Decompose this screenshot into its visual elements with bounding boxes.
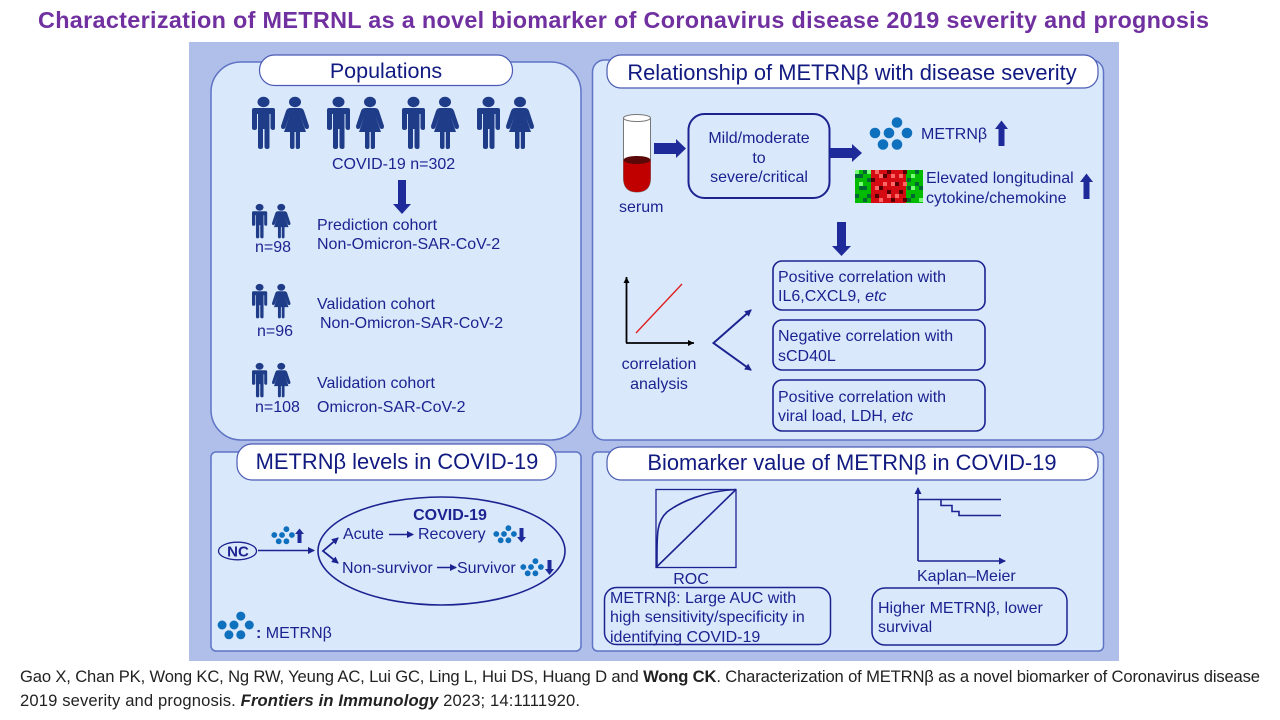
result box: sCD40L — [773, 320, 985, 370]
icon: NC dots up — [271, 526, 304, 544]
cytokine label — [926, 170, 1074, 207]
cytokine label: Elevated longitudinal — [926, 170, 1074, 187]
acute to recovery: Recovery — [418, 526, 486, 543]
heading: relationship: Relationship of METRNβ with disease severity — [627, 60, 1077, 85]
ROC text box: identifying COVID-19 — [610, 629, 760, 646]
correlation label: correlation — [622, 356, 696, 373]
correlation label — [622, 356, 696, 393]
severity box: Mild/moderate — [708, 130, 810, 147]
cohort: prediction: Non-Omicron-SAR-CoV-2 — [317, 236, 500, 253]
severity box — [688, 114, 830, 198]
arrow: down to cohorts — [393, 180, 411, 214]
heading: levels — [237, 444, 556, 480]
panel: relationship with disease severity — [592, 55, 1104, 440]
non-survivor to survivor: Survivor — [457, 560, 516, 577]
cohort: validation omicron — [252, 363, 466, 416]
ROC text box: METRNβ: Large AUC with — [610, 590, 796, 607]
arrow: serum to severity — [654, 139, 686, 158]
result box: viral load: Positive correlation with — [778, 389, 946, 406]
arrow: branches — [323, 538, 338, 563]
result box: viral load: viral load, LDH, etc — [778, 408, 913, 425]
heading: biomarker — [607, 447, 1098, 480]
arrow: correlation branches — [714, 310, 751, 370]
cohort: prediction — [252, 204, 500, 256]
background panel — [189, 42, 1119, 661]
cohort: validation non-omicron: n=96 — [257, 323, 293, 340]
icon: METRNβ dots — [870, 117, 912, 150]
panel: METRNβ levels — [211, 444, 581, 651]
acute to recovery: Acute — [343, 526, 384, 543]
cohort: validation non-omicron: Non-Omicron-SAR-CoV-2 — [320, 315, 503, 332]
severity box: to — [752, 150, 766, 167]
result box: sCD40L: Negative correlation with — [778, 328, 953, 345]
ROC label: ROC — [673, 571, 709, 588]
arrow: METRNβ up — [995, 120, 1008, 146]
icon: serum tube — [624, 114, 650, 192]
cohort: prediction: n=98 — [255, 239, 291, 256]
Kaplan-Meier text box: Higher METRNβ, lower — [878, 600, 1043, 617]
cohort: validation non-omicron — [252, 284, 503, 340]
severity box: severe/critical — [710, 169, 808, 186]
citation: Gao X, Chan PK, Wong KC, Ng RW, Yeung AC, Lui GC, Ling L, Hui DS, Huang D and Wong CK. Characterization of METRNβ as a novel biomarker of Coronavirus disease — [20, 667, 1260, 686]
total patient count: COVID-19 n=302 — [332, 156, 455, 173]
cohort: validation non-omicron: Validation cohort — [317, 296, 436, 313]
result box: viral load — [773, 380, 985, 431]
legend: METRNβ — [218, 612, 332, 642]
chart: ROC — [656, 490, 736, 568]
panel: biomarker value — [592, 447, 1104, 651]
citation: 2019 severity and prognosis. Frontiers in Immunology 2023; 14:1111920. — [20, 691, 580, 710]
title: Characterization of METRNL as a novel biomarker of Coronavirus disease 2019 severity and prognosis — [38, 7, 1209, 33]
result box: sCD40L: sCD40L — [778, 348, 836, 365]
serum label: serum — [619, 199, 663, 216]
cohort: prediction: Prediction cohort — [317, 217, 438, 234]
result box: IL6 CXCL9 — [773, 261, 985, 310]
chart: correlation plot — [626, 277, 694, 343]
acute to recovery — [343, 525, 526, 543]
cytokine label: cytokine/chemokine — [926, 190, 1067, 207]
correlation label: analysis — [630, 376, 688, 393]
ROC text box: high sensitivity/specificity in — [610, 609, 805, 626]
covid ellipse — [318, 497, 565, 605]
cohort: validation omicron: Validation cohort — [317, 375, 436, 392]
heading: biomarker: Biomarker value of METRNβ in COVID-19 — [647, 450, 1057, 475]
cohort: validation omicron: n=108 — [255, 399, 300, 416]
result box: IL6 CXCL9: Positive correlation with — [778, 269, 946, 286]
panel: populations — [211, 55, 581, 440]
citation — [20, 667, 1260, 710]
arrow: cytokine up — [1080, 174, 1093, 199]
result box: IL6 CXCL9: IL6,CXCL9, etc — [778, 288, 886, 305]
Kaplan-Meier text box — [872, 588, 1067, 645]
arrow: down to correlation — [832, 222, 851, 256]
covid label: COVID-19 — [413, 507, 487, 524]
Kaplan-Meier label: Kaplan–Meier — [917, 568, 1016, 585]
heading: populations — [260, 55, 512, 86]
heading: relationship — [607, 55, 1098, 88]
NC node — [218, 542, 256, 560]
ROC text box — [604, 588, 830, 646]
NC node: NC — [227, 544, 249, 560]
heading: populations: Populations — [330, 59, 442, 83]
icon: heatmap — [855, 170, 923, 203]
arrow: severity to results — [830, 144, 862, 162]
arrow: NC to COVID-19 — [258, 550, 314, 552]
chart: Kaplan-Meier — [918, 488, 1005, 561]
non-survivor to survivor: Non-survivor — [342, 560, 433, 577]
icon: population people row — [252, 97, 534, 149]
legend: METRNβ: : METRNβ — [256, 625, 332, 642]
Kaplan-Meier text box: survival — [878, 619, 932, 636]
cohort: validation omicron: Omicron-SAR-CoV-2 — [317, 399, 466, 416]
METRNβ label: METRNβ — [921, 126, 987, 143]
non-survivor to survivor — [342, 558, 554, 577]
heading: levels: METRNβ levels in COVID-19 — [256, 449, 538, 474]
